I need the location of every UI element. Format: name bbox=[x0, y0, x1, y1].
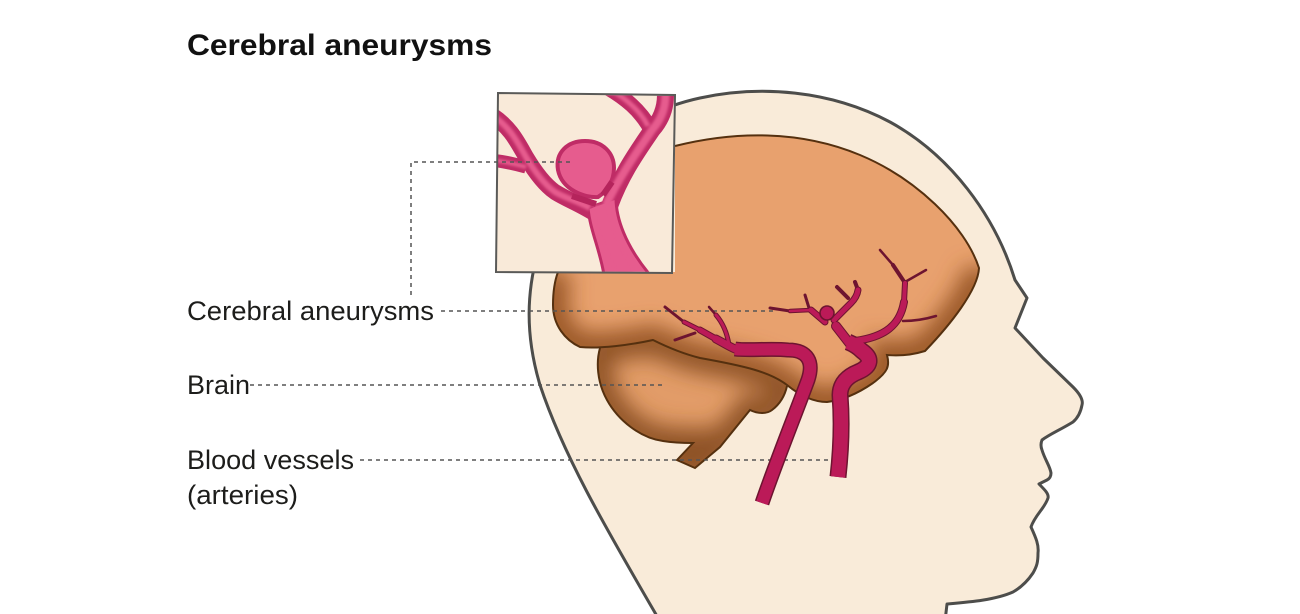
label: blood vessels (arteries): (arteries) bbox=[187, 480, 298, 510]
title: Cerebral aneurysms bbox=[187, 29, 492, 62]
inset leader bbox=[411, 162, 570, 295]
leader lines bbox=[250, 311, 828, 460]
label: cerebral aneurysms: Cerebral aneurysms bbox=[187, 296, 434, 326]
aneurysm on artery bbox=[820, 306, 834, 320]
artery outline bbox=[665, 250, 936, 503]
artery fill bbox=[684, 283, 905, 503]
head silhouette bbox=[529, 91, 1082, 614]
inset: magnified aneurysm bbox=[411, 88, 675, 295]
label: brain: Brain bbox=[187, 370, 250, 400]
inset border bbox=[496, 93, 675, 273]
brain bbox=[553, 135, 979, 468]
arteries bbox=[665, 250, 936, 503]
cerebellum bbox=[598, 340, 787, 468]
inset vessels bbox=[490, 88, 665, 275]
cerebrum bbox=[553, 135, 979, 402]
label: blood vessels (arteries): Blood vessels bbox=[187, 445, 354, 475]
